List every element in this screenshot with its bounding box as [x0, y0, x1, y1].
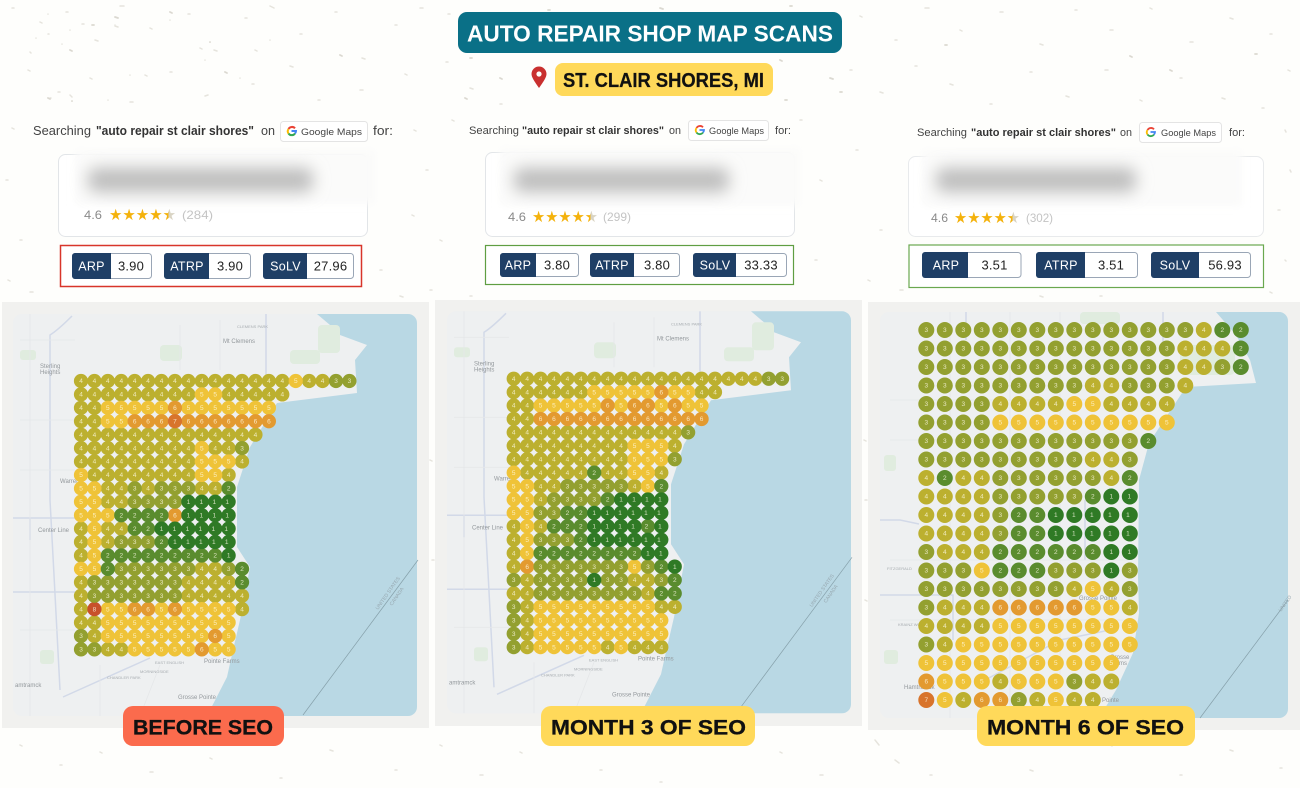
label: before SEO: BEFORE SEO: [133, 716, 273, 740]
metrics box: [486, 246, 794, 284]
business card with blurred name: [908, 150, 1264, 236]
rank grid: month 3: 554333321111: [512, 497, 672, 504]
rank grid: month 6: 333333333333333422: [924, 327, 1258, 334]
business card with blurred name: ★★★★★: [109, 206, 176, 224]
map frame and base map: KRAINZ WOODS: [898, 622, 930, 627]
map frame and base map: Grosse: [1110, 655, 1130, 661]
rank grid: before SEO: 4444444445554: [79, 459, 254, 466]
map frame and base map: EAST ENGLISH: [155, 660, 184, 665]
map frame and base map: amtramck: [15, 683, 42, 689]
search query line: Google Maps: [1161, 128, 1216, 139]
metrics box: ARP: [505, 258, 531, 272]
map frame and base map: Hamtramck: [904, 685, 936, 691]
search query line: on: [669, 125, 681, 137]
rank grid: before SEO: 452222222221: [79, 553, 240, 560]
rank grid: month 6: 444432211111: [924, 531, 1145, 538]
rank grid: before SEO: 445555565555555: [79, 405, 281, 412]
map frame and base map: Pointe Farms: [638, 656, 674, 662]
map frame and base map: CHANDLER PARK: [541, 672, 575, 677]
map frame and base map: Warren: [60, 479, 79, 485]
business card with blurred name: (284): [182, 208, 213, 222]
title banner: [458, 12, 842, 53]
map frame and base map: amtramck: [449, 680, 476, 686]
rank grid: month 3: 345555555555: [512, 631, 673, 638]
label: before SEO: [123, 706, 284, 746]
rank grid: before SEO: 345555555565: [79, 633, 240, 640]
map frame and base map: MORNINGSIDE: [574, 666, 603, 671]
metrics box: SoLV: [1160, 258, 1191, 272]
map frame and base map: Warren: [494, 476, 513, 482]
metrics box: ATRP: [170, 260, 204, 274]
business card with blurred name: (299): [603, 210, 631, 224]
search query line: [917, 122, 1245, 142]
search query line: on: [1120, 127, 1132, 139]
rank grid: month 3: 454222111121: [512, 524, 672, 531]
business card with blurred name: 4.6: [84, 208, 102, 222]
rank grid: before SEO: 445566676666666: [79, 418, 281, 426]
label: month 6 of SEO: MONTH 6 OF SEO: [987, 716, 1184, 740]
search query line: "auto repair st clair shores": [96, 124, 254, 138]
map frame and base map: UNITED STATES: [809, 573, 836, 608]
metrics box: SoLV: [270, 260, 301, 274]
rank grid: before SEO: 4444444445443: [79, 445, 254, 452]
rank grid: month 3: 3433331334432: [512, 577, 686, 584]
rank grid: month 3: 554433333452: [512, 483, 673, 490]
rank grid: month 3: 553322111111: [512, 510, 671, 517]
rank grid: before SEO: 554433331111: [79, 499, 239, 506]
map frame and base map: CLEMENS PARK: [671, 321, 702, 326]
map frame and base map: Pointe: [1102, 698, 1120, 704]
rank grid: month 3: 3455555555544: [512, 604, 686, 611]
rank grid: before SEO: 5523333334432: [79, 566, 254, 573]
metrics box: 56.93: [1208, 258, 1242, 272]
map frame and base map: FITZGERALD: [887, 566, 912, 571]
map frame and base map: EAST ENGLISH: [589, 657, 618, 662]
rank grid: before SEO: 454333211111: [79, 539, 238, 546]
business card with blurred name: 4.6: [508, 210, 526, 224]
map frame and base map: CANADA: [389, 586, 406, 607]
rank grid: month 3: 4433333333422: [512, 591, 686, 598]
map frame and base map: MORNINGSIDE: [140, 669, 169, 674]
rank grid: month 6: 333522233313: [924, 568, 1147, 575]
rank grid: month 6: [924, 327, 1258, 704]
map frame and base map: Grosse Pointe: [1079, 596, 1118, 602]
title banner: AUTO REPAIR SHOP MAP SCANS: [467, 20, 833, 46]
rank grid: before SEO: 4333333344444: [79, 593, 254, 600]
map frame and base map: Mt Clemens: [657, 336, 689, 342]
map frame and base map: Grosse Pointe: [178, 695, 217, 701]
rank grid: before SEO: 444444444444444454433: [79, 378, 361, 385]
rank grid: month 3: 4444444445554: [512, 443, 686, 450]
map frame and base map: Farms: [1110, 661, 1127, 667]
location label: ST. CLAIR SHORES, MI: [563, 70, 764, 92]
search query line: [33, 122, 393, 142]
metrics box: 3.51: [981, 258, 1008, 272]
search query line: Google Maps: [709, 126, 764, 137]
metrics box: [909, 245, 1264, 288]
panel: month 6 of SEO: [868, 122, 1300, 746]
map frame and base map: Center Line: [38, 528, 70, 534]
search query line: [469, 120, 791, 140]
map frame and base map: CHANDLER PARK: [107, 675, 141, 680]
metrics box: ARP: [933, 258, 959, 272]
rank grid: month 3: 44444444444443: [512, 430, 700, 437]
rank grid: before SEO: 4333333344442: [79, 580, 254, 586]
rank grid: before SEO: 554434333442: [79, 486, 240, 493]
business card with blurred name: [486, 148, 800, 236]
rank grid: month 6: 333333333333334432: [924, 364, 1258, 371]
rank grid: month 3: 452222222211: [512, 550, 672, 557]
rank grid: month 3: 453332111111: [512, 537, 671, 544]
rank grid: month 3: 446666666666666: [512, 416, 713, 423]
rank grid: month 6: 3333333333332: [924, 438, 1165, 445]
search query line: for:: [775, 125, 791, 137]
panel: month 3 of SEO: [435, 120, 862, 746]
rank grid: month 6: 33334444554444: [924, 401, 1184, 408]
rank grid: month 6: 65554555344: [924, 679, 1128, 686]
rank grid: before SEO: 4855665655554: [79, 606, 254, 613]
business card with blurred name: (302): [1026, 211, 1053, 225]
map frame and base map: Center Line: [472, 525, 504, 531]
rank grid: month 3: 544444244554: [512, 470, 673, 477]
business card with blurred name: ★★★★★: [532, 208, 598, 226]
rank grid: month 6: 7546634544: [924, 697, 1110, 704]
business card with blurred name: [58, 150, 375, 236]
metrics box: 33.33: [744, 258, 778, 272]
map frame and base map: CANADA: [823, 583, 840, 604]
business card with blurred name: ★★★★★: [954, 209, 1020, 227]
rank grid: month 6: 333333333333334442: [924, 346, 1258, 353]
map frame and base map: CLEMENS PARK: [237, 324, 268, 329]
metrics box: ATRP: [1044, 258, 1078, 272]
rank grid: month 3: [512, 376, 794, 651]
metrics box: 3.80: [544, 258, 570, 272]
rank grid: before SEO: 445555555555: [79, 620, 240, 627]
map frame and base map: Mt Clemens: [223, 339, 255, 345]
search query line: "auto repair st clair shores": [971, 127, 1116, 139]
rank grid: before SEO: 454422111111: [79, 526, 238, 533]
map frame and base map: Pointe Farms: [204, 659, 240, 665]
search query line: for:: [1229, 127, 1245, 139]
rank grid: month 6: 55555555555: [924, 660, 1128, 667]
rank grid: before SEO: 44444444444444: [79, 432, 267, 439]
rank grid: month 3: 4633333335321: [512, 564, 686, 571]
rank grid: month 3: 444444444444444444433: [512, 376, 794, 383]
rank grid: month 6: 344422222211: [924, 549, 1146, 556]
metrics box: [60, 246, 362, 286]
metrics box: 3.80: [644, 258, 670, 272]
map frame and base map: [435, 300, 862, 726]
map frame and base map: [868, 302, 1300, 730]
metrics box: SoLV: [700, 258, 731, 272]
rank grid: month 6: 345555555555: [924, 642, 1147, 649]
map frame and base map: [2, 302, 429, 728]
rank grid: month 3: 4444445555565544: [512, 389, 727, 396]
rank grid: month 6: 333333333443334: [924, 383, 1202, 390]
business card with blurred name: 4.6: [931, 211, 948, 225]
map frame and base map: Sterling: [474, 361, 494, 367]
label: month 6 of SEO: [977, 706, 1195, 746]
search query line: "auto repair st clair shores": [522, 125, 664, 137]
rank grid: before SEO: 544444444554: [79, 472, 240, 479]
search query line: Searching: [469, 125, 519, 137]
metrics box: ARP: [78, 260, 105, 274]
rank grid: month 6: 333333334543: [924, 586, 1147, 593]
rank grid: month 6: 444433333211: [924, 494, 1146, 501]
metrics box: 3.51: [1098, 258, 1124, 272]
map frame and base map: Heights: [474, 367, 494, 373]
rank grid: before SEO: 4444444445544444: [79, 392, 294, 399]
rank grid: before SEO: 555222261111: [79, 512, 239, 519]
rank grid: month 3: 445555565665655: [512, 403, 713, 410]
metrics box: 3.90: [118, 258, 144, 274]
location label: [555, 63, 773, 96]
search query line: Searching: [917, 127, 967, 139]
metrics box: ATRP: [595, 258, 629, 272]
label: month 3 of SEO: MONTH 3 OF SEO: [551, 716, 746, 740]
rank grid: before SEO: 334455555655: [79, 647, 240, 654]
map frame and base map: Sterling: [40, 364, 60, 370]
panel: before SEO: [2, 122, 429, 746]
search query line: Searching: [33, 124, 91, 138]
search query line: on: [261, 124, 275, 138]
metrics box: 27.96: [314, 258, 347, 274]
rank grid: before SEO: [79, 378, 361, 654]
search query line: for:: [373, 124, 393, 138]
rank grid: month 3: 4444444445553: [512, 456, 686, 463]
map frame and base map: Heights: [40, 370, 60, 376]
map frame and base map: UNITED STATES: [375, 575, 402, 611]
rank grid: month 6: 344466666554: [924, 605, 1147, 612]
rank grid: month 6: 33335555555555: [924, 420, 1184, 427]
label: month 3 of SEO: [541, 706, 755, 746]
rank grid: month 6: 444455555555: [924, 623, 1147, 630]
map frame and base map: UNITED: [1278, 594, 1294, 613]
search query line: Google Maps: [301, 127, 362, 138]
icon: location pin: [532, 66, 546, 88]
rank grid: month 3: 345555555555: [512, 618, 673, 625]
rank grid: month 6: 424433333342: [924, 475, 1147, 482]
rank grid: month 6: 333333333443: [924, 457, 1147, 464]
map frame and base map: Grosse Pointe: [612, 692, 651, 698]
metrics box: 3.90: [217, 258, 243, 274]
rank grid: month 3: 345555545444: [512, 644, 673, 651]
rank grid: month 6: 444432211111: [924, 512, 1145, 519]
